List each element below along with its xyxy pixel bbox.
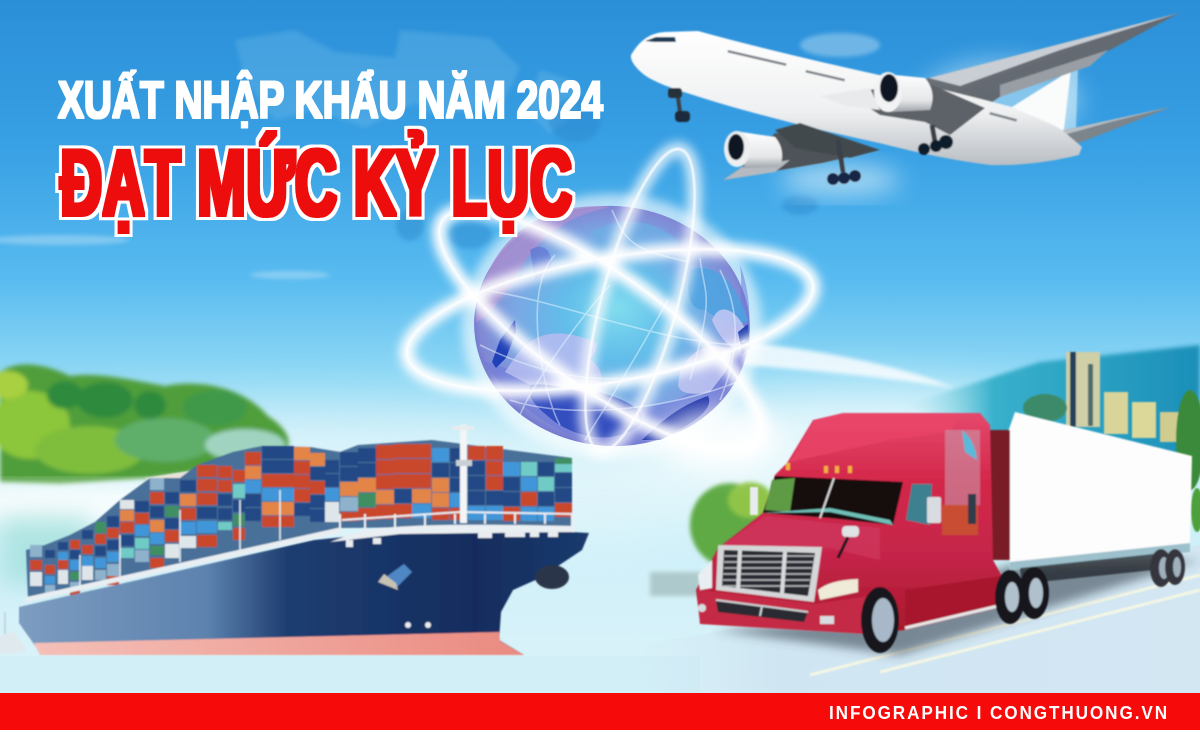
tug boat (0, 612, 26, 654)
orbit rings (396, 139, 824, 488)
footer credit: INFOGRAPHIC I CONGTHUONG.VN (829, 703, 1169, 723)
bumper (697, 590, 870, 634)
trees on the left shore (0, 364, 289, 484)
landing gear (668, 88, 953, 185)
anti-fouling red stripe (34, 632, 524, 655)
container stacks (26, 440, 572, 600)
bow bulb shadow (535, 565, 569, 589)
roof highlight (790, 413, 960, 462)
container ship (0, 425, 589, 655)
land masses (492, 222, 750, 440)
water under the ship (0, 656, 700, 693)
trees behind the truck (650, 482, 772, 596)
footer bar (0, 693, 1200, 732)
light haze behind the ship (0, 410, 820, 550)
plane (631, 13, 1179, 196)
globe grid lines (480, 210, 748, 440)
globe with orbits (396, 139, 955, 488)
hood highlight (722, 516, 880, 560)
lower engine (724, 131, 782, 168)
light blue containers (45, 448, 554, 584)
vertical tail (1012, 70, 1071, 136)
side window and mirror (750, 484, 941, 558)
upper engine (874, 72, 933, 112)
side skirt (905, 576, 1001, 628)
globe sphere (466, 197, 758, 455)
bridge behind containers (145, 470, 195, 492)
main heading: ĐẠT MỨC KỶ LỤC (60, 130, 572, 235)
horizontal stabiliser (1050, 107, 1171, 143)
near wing (723, 133, 879, 180)
sea and skyline at right (905, 345, 1200, 532)
teal containers (120, 458, 572, 558)
cab side panel reflection (942, 430, 980, 535)
near-wing root (775, 123, 880, 158)
globe glow (462, 194, 762, 458)
mast (452, 425, 474, 523)
anchor (378, 564, 412, 590)
light streak to the right (742, 342, 955, 388)
far wing (850, 13, 1179, 132)
subtitle heading: XUẤT NHẬP KHẨU NĂM 2024 (58, 69, 603, 130)
container stack backing (26, 440, 572, 600)
white and grey containers (30, 500, 339, 586)
truck (696, 412, 1200, 655)
grille (716, 545, 822, 602)
windshield (763, 476, 903, 525)
cockpit windows (645, 37, 676, 42)
green containers (70, 458, 572, 580)
navy containers (45, 446, 572, 559)
fuselage (631, 31, 1082, 165)
upper engine pylon and wing underside (845, 84, 985, 135)
red containers (30, 444, 572, 596)
fuselage lettering marks (727, 50, 1017, 122)
trailer (990, 412, 1192, 584)
shore haze and water left (0, 489, 240, 585)
hull portholes (346, 531, 558, 628)
deck railing (25, 490, 574, 600)
hull (19, 526, 589, 655)
road (640, 545, 1200, 693)
white bow deck (330, 525, 574, 542)
background: faint world map and clouds (0, 30, 1100, 550)
wheels (861, 549, 1185, 653)
ground shadow (715, 560, 1200, 655)
white glow left of truck (660, 410, 780, 470)
marker lights (786, 463, 852, 473)
headlights (698, 560, 858, 600)
orange containers (120, 447, 449, 532)
cab body (696, 413, 1003, 634)
